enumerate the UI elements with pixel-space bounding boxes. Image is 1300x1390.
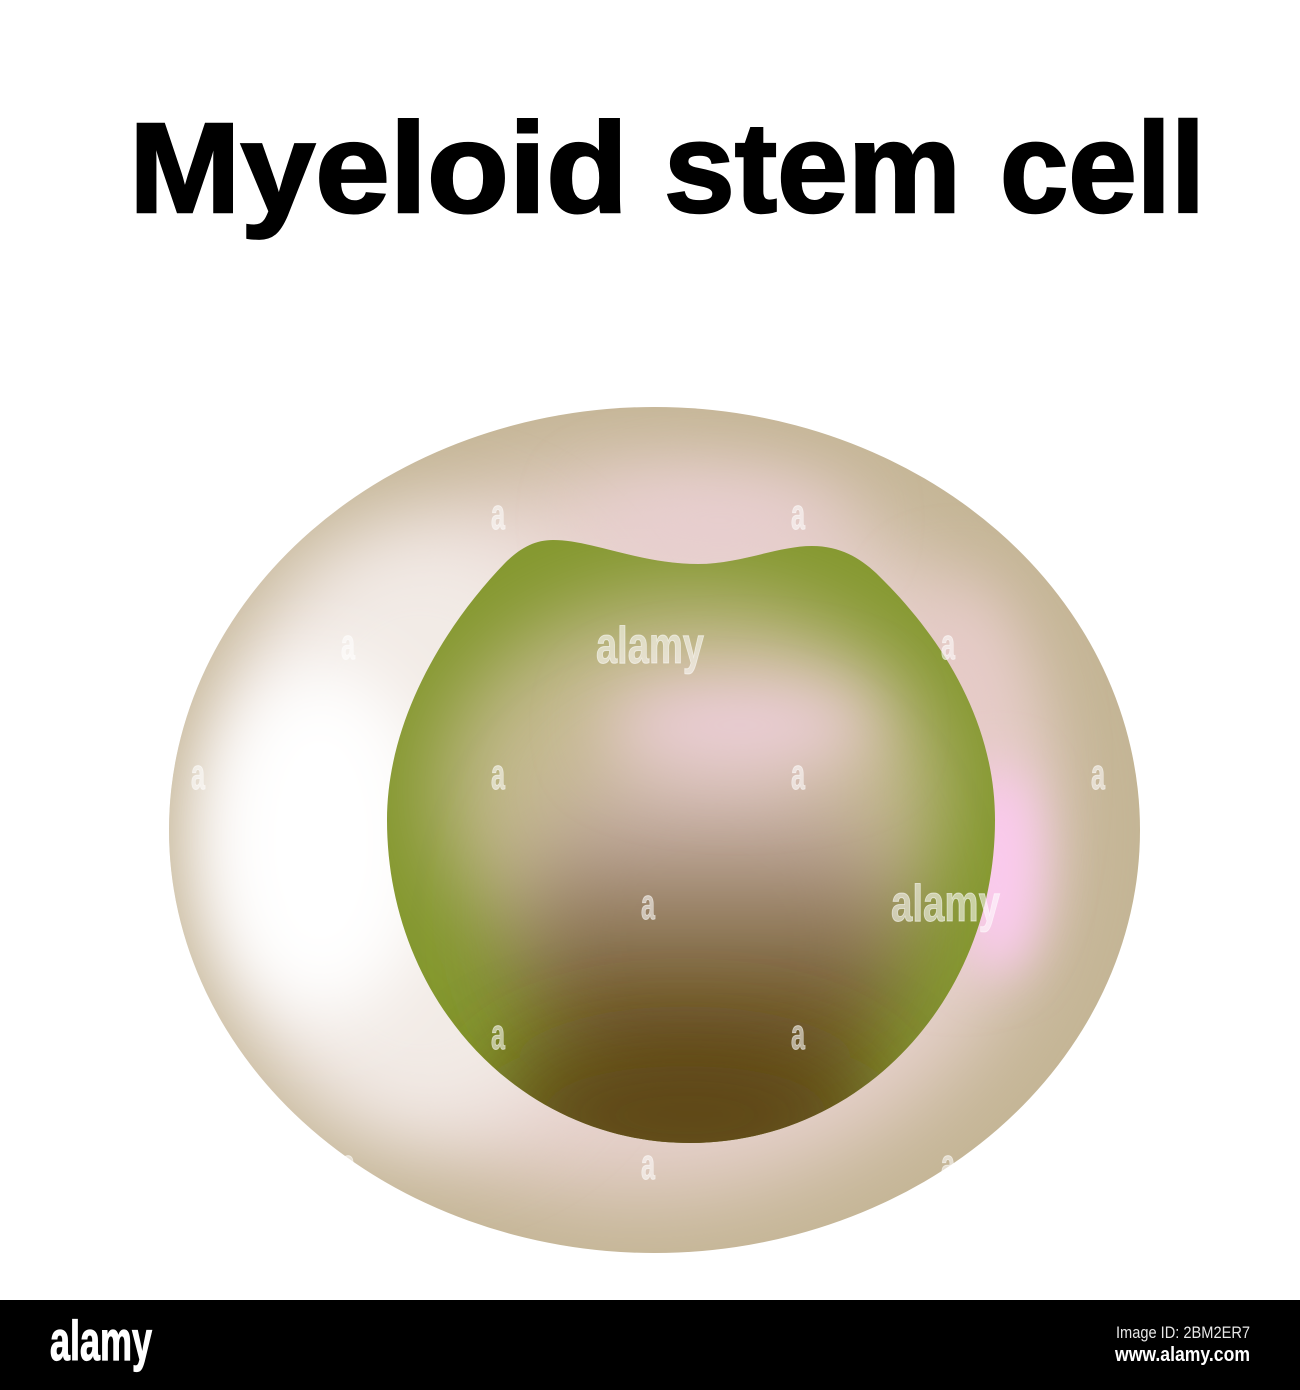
title [129,97,1205,240]
watermark: small letters: a [791,1010,805,1059]
cytoplasm white highlight [205,665,435,1015]
watermark: small letters: a [491,750,505,799]
watermark: small letters: a [641,880,655,929]
footer url: www.alamy.com [1114,1344,1250,1366]
watermark: small letters: a [341,1140,355,1189]
nucleus pink arc [605,677,875,773]
watermark: small letters: a [191,750,205,799]
cytoplasm pale left area [205,520,635,1140]
watermark: small letters: a [491,1010,505,1059]
watermark: small letters: a [791,750,805,799]
nucleus [387,540,995,1143]
nucleus tan centre [440,595,940,985]
cytoplasm pink crescent [938,568,1053,775]
watermark: small letters [191,490,1105,1189]
watermark: small letters: a [791,490,805,539]
watermark: small letters: a [941,620,955,669]
cell body [160,400,1150,1260]
watermark: small letters: a [941,1140,955,1189]
footer logo: alamy [50,1309,152,1372]
cytoplasm pink glow [960,765,1040,975]
title: cell [1000,97,1205,240]
watermark: large alamy centre: alamy [596,617,704,675]
watermarks [191,490,1105,1189]
watermark: small letters: a [1091,750,1105,799]
title: Myeloid [129,97,628,240]
cytoplasm pink top [631,451,850,534]
watermark: small letters: a [341,620,355,669]
footer bar [0,1300,1300,1390]
cytoplasm pale pink halo [235,465,1045,1195]
watermark: large alamy right: alamy [891,875,1000,933]
watermark: small letters: a [491,490,505,539]
nucleus pink and brown core [515,740,905,1140]
title: stem [664,97,961,240]
watermark: small letters: a [641,1140,655,1189]
image id: Image ID: 2BM2ER7 [1116,1323,1250,1342]
nucleus dark base [490,1035,880,1195]
